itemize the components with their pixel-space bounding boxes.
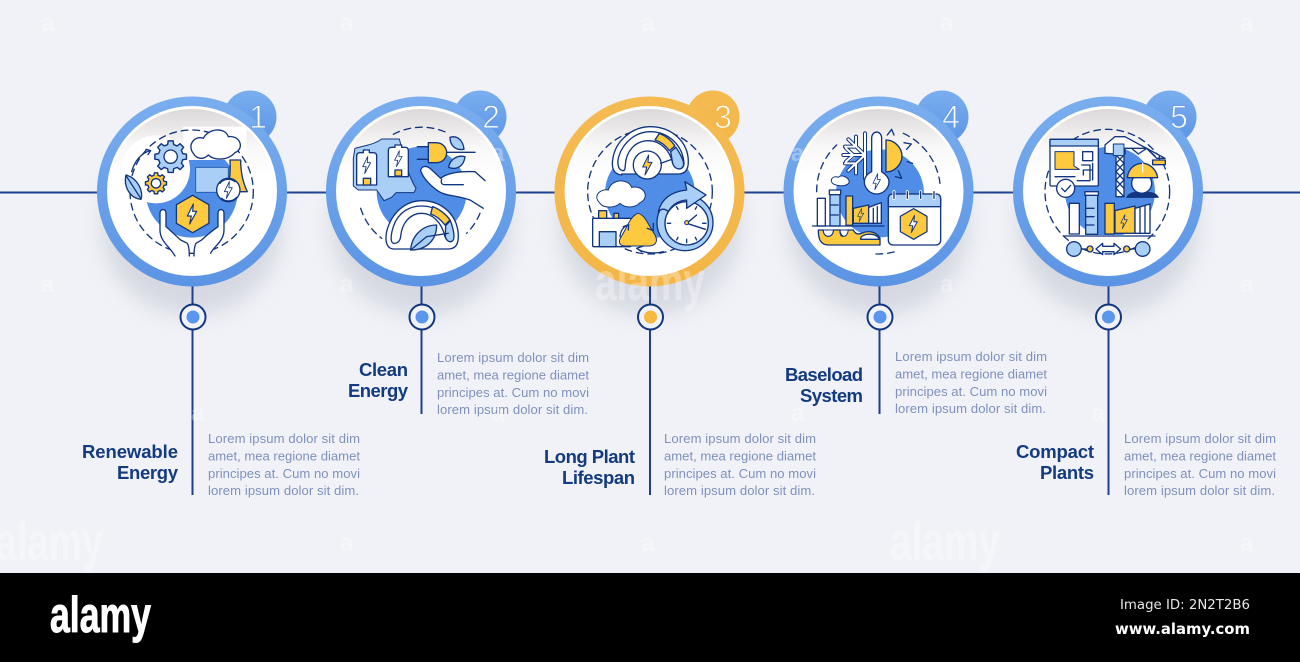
heading bbox=[544, 446, 635, 488]
description: Lorem ipsum dolor sit dim bbox=[895, 349, 1047, 364]
description bbox=[1124, 431, 1276, 498]
description: amet, mea regione diamet bbox=[664, 448, 816, 464]
watermarks: a bbox=[41, 10, 55, 37]
description: amet, mea regione diamet bbox=[208, 448, 360, 464]
icon: clean energy bbox=[353, 127, 485, 250]
watermarks: a bbox=[491, 140, 505, 167]
icon: renewable energy hands bbox=[122, 127, 253, 256]
description: lorem ipsum dolor sit dim. bbox=[895, 401, 1046, 416]
description: Lorem ipsum dolor sit dim bbox=[664, 431, 816, 446]
heading: Long Plant bbox=[544, 446, 635, 467]
connector with node bbox=[410, 286, 434, 414]
heading: Energy bbox=[348, 380, 409, 401]
number badge bbox=[454, 90, 506, 144]
number badge bbox=[1144, 90, 1196, 144]
description bbox=[895, 349, 1047, 416]
watermarks: a bbox=[940, 10, 954, 37]
heading: Compact bbox=[1016, 441, 1094, 462]
description: lorem ipsum dolor sit dim. bbox=[208, 483, 359, 498]
watermarks: a bbox=[791, 400, 805, 427]
panel: long plant lifespan bbox=[544, 90, 816, 498]
heading bbox=[1016, 441, 1094, 483]
description: amet, mea regione diamet bbox=[895, 366, 1047, 382]
description: principes at. Cum no movi bbox=[437, 385, 589, 400]
description: principes at. Cum no movi bbox=[1124, 466, 1276, 481]
footer bar bbox=[0, 573, 1300, 662]
number: 4 bbox=[942, 99, 960, 135]
connector with node bbox=[1096, 286, 1121, 495]
description: Lorem ipsum dolor sit dim bbox=[1124, 431, 1276, 446]
number: 5 bbox=[1170, 99, 1188, 135]
number: 1 bbox=[249, 99, 267, 135]
ring bbox=[784, 96, 974, 286]
heading bbox=[348, 359, 409, 401]
watermarks: a bbox=[1240, 10, 1254, 37]
watermarks: a bbox=[340, 530, 354, 557]
watermarks: alamy bbox=[890, 512, 1000, 572]
heading: System bbox=[800, 385, 863, 406]
heading: Renewable bbox=[82, 441, 178, 462]
description bbox=[664, 431, 816, 498]
description: principes at. Cum no movi bbox=[208, 466, 360, 481]
icon: baseload system bbox=[813, 129, 941, 254]
number badge bbox=[916, 90, 968, 144]
image id: Image ID: 2N2T2B6 bbox=[1120, 597, 1250, 613]
heading: Clean bbox=[359, 359, 408, 380]
description bbox=[208, 431, 360, 498]
description bbox=[437, 350, 589, 417]
icon: compact plants bbox=[1045, 129, 1170, 256]
number: 3 bbox=[714, 99, 732, 135]
watermarks: a bbox=[191, 400, 205, 427]
watermarks: alamy bbox=[0, 512, 103, 572]
watermarks: a bbox=[641, 10, 655, 37]
watermarks: a bbox=[1091, 400, 1105, 427]
number badge bbox=[686, 90, 740, 144]
website: www.alamy.com bbox=[1115, 620, 1250, 638]
description: Lorem ipsum dolor sit dim bbox=[437, 350, 589, 365]
watermarks: a bbox=[41, 271, 55, 298]
panel: baseload system bbox=[784, 90, 1047, 416]
watermarks: a bbox=[491, 400, 505, 427]
panel: renewable energy bbox=[82, 90, 360, 498]
number badge bbox=[224, 90, 276, 144]
watermarks: a bbox=[940, 271, 954, 298]
watermarks: a bbox=[1240, 271, 1254, 298]
description: lorem ipsum dolor sit dim. bbox=[1124, 483, 1275, 498]
watermarks: a bbox=[340, 10, 354, 37]
description: lorem ipsum dolor sit dim. bbox=[437, 402, 588, 417]
timeline axis bbox=[0, 192, 1300, 194]
panel: compact plants bbox=[1013, 90, 1276, 498]
heading: Lifespan bbox=[562, 467, 635, 488]
heading: Plants bbox=[1040, 462, 1094, 483]
description: lorem ipsum dolor sit dim. bbox=[664, 483, 815, 498]
icon: long plant lifespan bbox=[588, 127, 713, 254]
connector with node bbox=[180, 286, 206, 495]
ring bbox=[97, 96, 287, 286]
watermarks: alamy bbox=[595, 252, 705, 312]
watermarks: a bbox=[340, 271, 354, 298]
footer logo: alamy bbox=[50, 587, 151, 643]
ring bbox=[326, 96, 516, 286]
ring bbox=[554, 96, 744, 286]
heading bbox=[785, 364, 863, 406]
connector with node bbox=[638, 286, 663, 495]
description: principes at. Cum no movi bbox=[895, 384, 1047, 399]
connector with node bbox=[868, 286, 892, 414]
watermarks: a bbox=[1240, 530, 1254, 557]
heading: Baseload bbox=[785, 364, 863, 385]
description: principes at. Cum no movi bbox=[664, 466, 816, 481]
watermarks: a bbox=[641, 530, 655, 557]
ring bbox=[1013, 96, 1203, 286]
number: 2 bbox=[482, 99, 500, 135]
description: amet, mea regione diamet bbox=[437, 368, 589, 382]
heading bbox=[82, 441, 179, 483]
watermarks: a bbox=[791, 140, 805, 167]
heading: Energy bbox=[117, 462, 179, 483]
description: Lorem ipsum dolor sit dim bbox=[208, 431, 360, 446]
panel: clean energy bbox=[326, 90, 589, 417]
description: amet, mea regione diamet bbox=[1124, 448, 1276, 464]
